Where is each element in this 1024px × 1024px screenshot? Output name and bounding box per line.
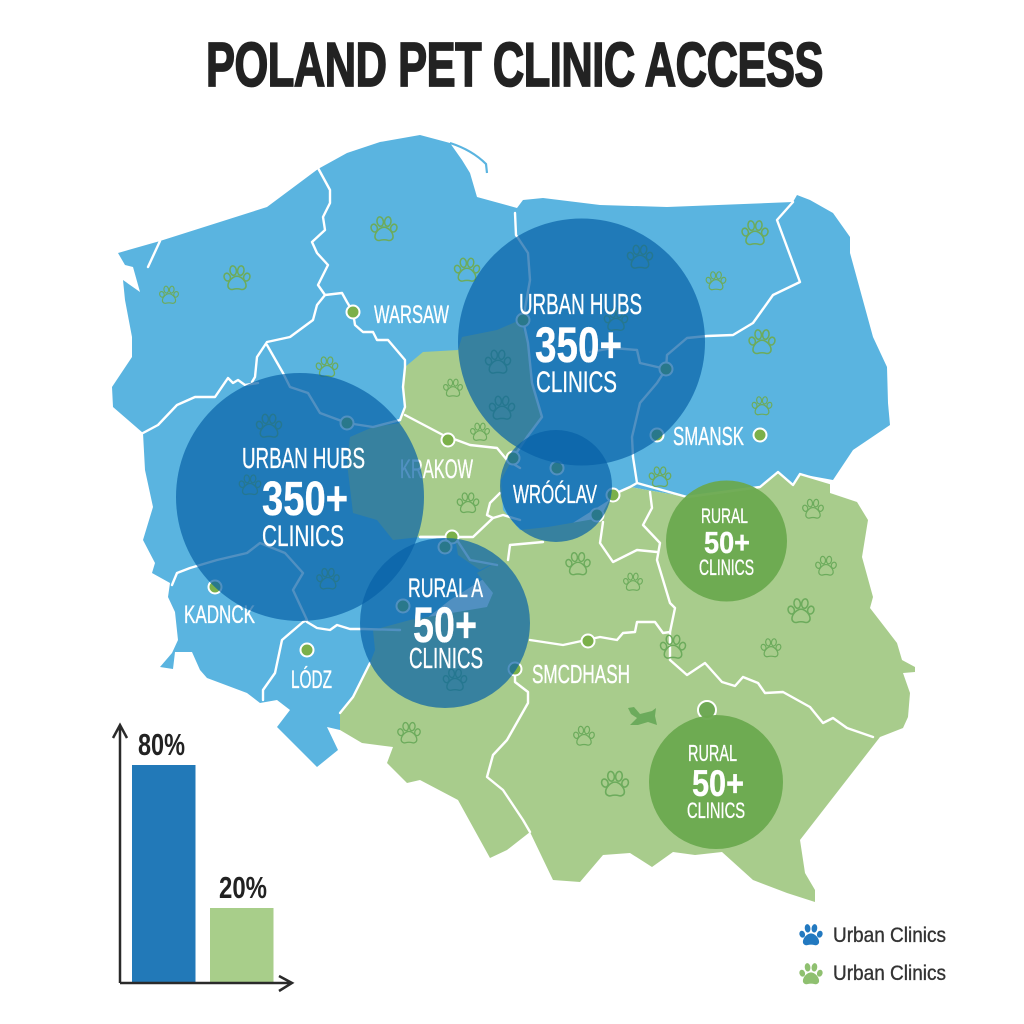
callout: rural A: RURAL A bbox=[408, 573, 483, 603]
callout: urban hubs west: CLINICS bbox=[262, 520, 344, 553]
callout: Wroclaw bbox=[500, 430, 612, 542]
city labels on map bbox=[184, 301, 744, 694]
callout: urban hubs north bbox=[458, 218, 705, 466]
city labels on map: KRAKOW bbox=[400, 454, 473, 484]
legend icon: blue paw bbox=[798, 924, 824, 945]
region: urban clinics (blue) bbox=[112, 135, 890, 767]
Hel peninsula spit bbox=[450, 143, 487, 173]
icons: paw markers bbox=[159, 216, 837, 796]
region: rural clinics (green) bbox=[340, 320, 915, 902]
callout: rural east bbox=[666, 480, 787, 602]
callout: urban hubs west: URBAN HUBS bbox=[242, 443, 365, 475]
callout: urban hubs north: CLINICS bbox=[536, 366, 617, 399]
city labels on map: SMANSK bbox=[673, 421, 744, 451]
callout: rural A bbox=[360, 538, 530, 708]
legend label: urban clinics blue: Urban Clinics bbox=[833, 924, 946, 947]
callout: rural south: RURAL bbox=[688, 740, 737, 766]
title: POLAND PET CLINIC ACCESS bbox=[206, 32, 823, 100]
city labels on map: WARSAW bbox=[374, 301, 449, 329]
chart axes bbox=[113, 725, 292, 991]
callout: rural east: CLINICS bbox=[699, 555, 754, 580]
callout: urban hubs west: 350+ bbox=[262, 473, 348, 526]
callout: rural A: CLINICS bbox=[409, 643, 483, 675]
callout: rural east: RURAL bbox=[701, 505, 748, 528]
callout: rural east: 50+ bbox=[704, 525, 750, 560]
legend icon: green paw bbox=[798, 963, 824, 984]
callout: rural A: 50+ bbox=[413, 597, 477, 653]
map of Poland bbox=[112, 135, 915, 902]
bar: urban 80% bbox=[132, 765, 196, 983]
legend label: urban clinics green: Urban Clinics bbox=[833, 962, 946, 985]
bar: rural 20% bbox=[210, 908, 274, 983]
callout: urban hubs north: URBAN HUBS bbox=[519, 289, 642, 321]
callout: urban hubs north: 350+ bbox=[535, 317, 622, 373]
icon: small dog silhouette bbox=[628, 707, 657, 725]
city labels on map: LÓDZ bbox=[291, 665, 332, 694]
callout: rural south bbox=[649, 715, 783, 849]
bar chart bbox=[113, 725, 292, 991]
callout: rural south: CLINICS bbox=[687, 798, 745, 823]
callout: rural south: 50+ bbox=[692, 763, 744, 804]
city labels on map: KADNCK bbox=[184, 601, 255, 629]
callout: Wroclaw: WRÓĆLAV bbox=[513, 479, 597, 509]
legend bbox=[798, 924, 946, 985]
location markers bbox=[208, 306, 766, 719]
city labels on map: SMCDHASH bbox=[532, 659, 630, 689]
callout: urban hubs west bbox=[176, 373, 424, 621]
value: 20%: 20% bbox=[219, 870, 267, 905]
value: 80%: 80% bbox=[138, 727, 185, 762]
